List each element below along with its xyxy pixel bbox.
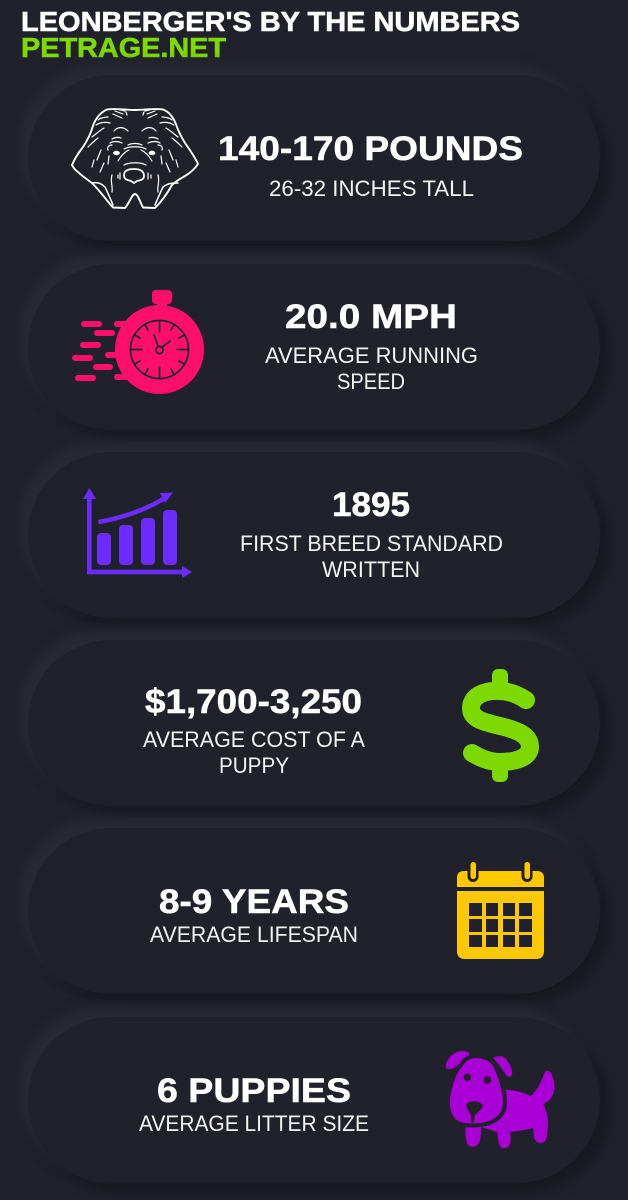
stat: litter size: 6 PUPPIES <box>157 1072 351 1110</box>
stat label: height: 26-32 INCHES TALL <box>269 176 474 201</box>
stat label: litter size: AVERAGE LITTER SIZE <box>139 1111 369 1136</box>
stat label: breed standard: WRITTEN <box>322 557 420 582</box>
icon: stopwatch <box>75 290 204 394</box>
stat label: speed: AVERAGE RUNNING <box>265 343 478 368</box>
panel: puppy cost <box>28 640 600 806</box>
stat label: lifespan: AVERAGE LIFESPAN <box>150 922 358 947</box>
icon: bar chart with rising arrow <box>83 488 192 578</box>
panel: weight and height <box>28 75 600 241</box>
panel: lifespan <box>28 828 600 994</box>
stat: lifespan: 8-9 YEARS <box>159 883 349 921</box>
icon: calendar <box>457 862 544 959</box>
stat label: cost: AVERAGE COST OF A <box>143 727 365 752</box>
stat label: speed: SPEED <box>337 369 405 394</box>
title: LEONBERGER'S BY THE NUMBERS <box>21 6 520 37</box>
stat label: speed <box>265 343 478 394</box>
title <box>21 6 520 63</box>
stat label: breed standard <box>240 531 503 582</box>
stat label: cost: PUPPY <box>219 753 289 778</box>
stat label: cost <box>143 727 365 778</box>
panel: litter size <box>28 1017 600 1183</box>
stat label: breed standard: FIRST BREED STANDARD <box>240 531 503 556</box>
stat: year: 1895 <box>332 486 410 524</box>
stat: speed: 20.0 MPH <box>285 298 457 336</box>
panel: breed standard <box>28 452 600 618</box>
icon: purple dog <box>446 1051 555 1148</box>
panel: running speed <box>28 264 600 430</box>
title: PETRAGE.NET <box>21 32 226 63</box>
stat: cost: $1,700-3,250 <box>145 683 362 721</box>
stat: weight: 140-170 POUNDS <box>218 130 523 168</box>
icon: leonberger dog head <box>72 109 198 208</box>
icon: dollar sign <box>471 669 530 782</box>
